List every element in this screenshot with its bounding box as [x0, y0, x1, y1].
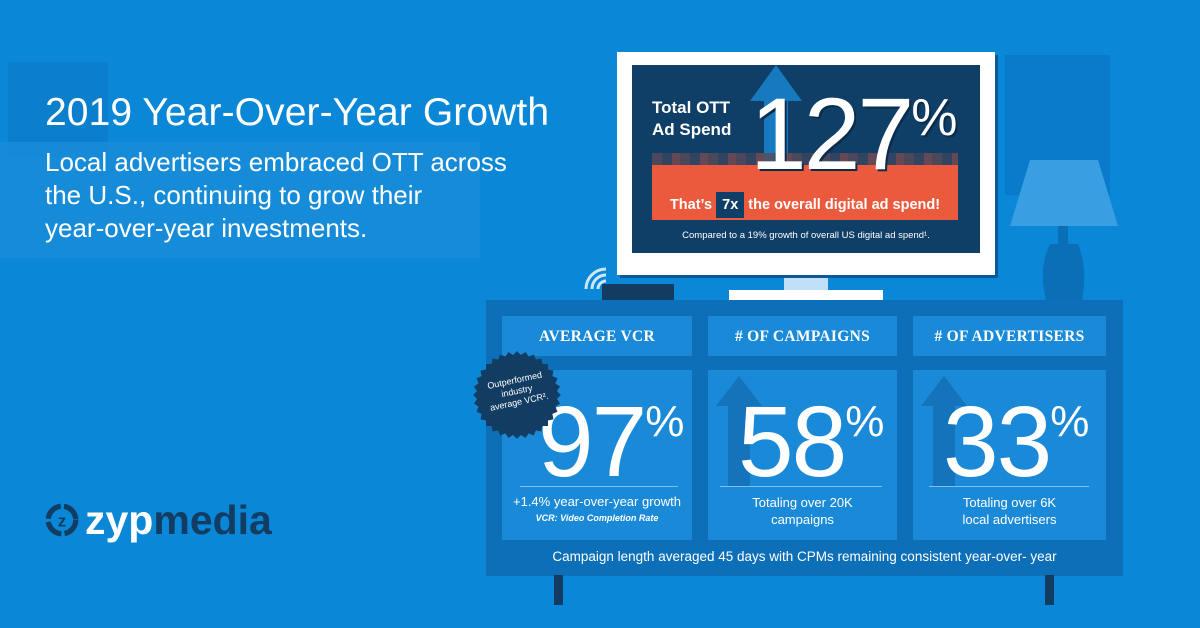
panel: advertisers: local advertisers: [963, 512, 1056, 527]
TV: [617, 52, 998, 300]
background decorative blocks: [8, 62, 108, 157]
header: campaigns: [708, 316, 897, 356]
starburst badge: Outperformed: [486, 370, 543, 391]
label: Total OTT: [652, 98, 730, 117]
starburst badge: average VCR².: [489, 391, 549, 413]
tv frame: [617, 52, 995, 275]
panel: advertisers: Totaling over 6K: [963, 495, 1056, 510]
tv screen: That’s the overall digital ad spend!: [670, 197, 940, 213]
header: advertisers: [913, 316, 1106, 356]
tv stand: [784, 274, 828, 290]
red banner: [652, 165, 958, 220]
tv screen: 7x: [722, 197, 738, 213]
panel: campaigns: Totaling over 20K: [752, 495, 853, 510]
panel: campaigns: [708, 370, 897, 540]
panel: campaigns: campaigns: [771, 512, 834, 527]
header: campaigns: # OF CAMPAIGNS: [735, 328, 870, 345]
subtitle: the U.S., continuing to grow their: [45, 180, 422, 210]
panel: vcr: +1.4% year-over-year growth: [513, 494, 681, 509]
panel: vcr: 97%: [538, 386, 684, 498]
logo: zypmedia: z: [58, 511, 66, 530]
starburst badge: [473, 351, 561, 439]
panel: advertisers: 33%: [943, 386, 1089, 498]
legs: [554, 575, 563, 605]
header: advertisers: # OF ADVERTISERS: [934, 328, 1085, 345]
subtitle: year-over-year investments.: [45, 213, 367, 243]
starburst badge: industry: [500, 383, 533, 399]
cabinet: [486, 300, 1123, 576]
header: average vcr: [502, 316, 692, 356]
pixel fade: [652, 153, 958, 167]
label: Ad Spend: [652, 120, 731, 139]
header: average vcr: AVERAGE VCR: [539, 328, 655, 345]
arrow: [750, 65, 802, 162]
wifi icon: [584, 268, 606, 289]
note: Compared to a 19% growth of overall US digital ad spend¹.: [682, 230, 930, 241]
127%: 127%: [750, 77, 957, 191]
subtitle: [45, 147, 507, 243]
router box: [602, 284, 674, 301]
logo: zypmedia: zypmedia: [85, 496, 272, 542]
panel: advertisers: [913, 370, 1106, 540]
panel: vcr: VCR: Video Completion Rate: [536, 513, 658, 523]
subtitle: Local advertisers embraced OTT across: [45, 147, 507, 177]
label: [652, 98, 731, 139]
footer text: Campaign length averaged 45 days with CPMs remaining consistent year-over- year: [552, 549, 1057, 564]
panel: vcr: [502, 370, 692, 540]
title: 2019 Year-Over-Year Growth: [45, 91, 549, 134]
panel: campaigns: 58%: [738, 386, 884, 498]
tv screen: [632, 65, 980, 253]
lamp: [1010, 160, 1118, 300]
